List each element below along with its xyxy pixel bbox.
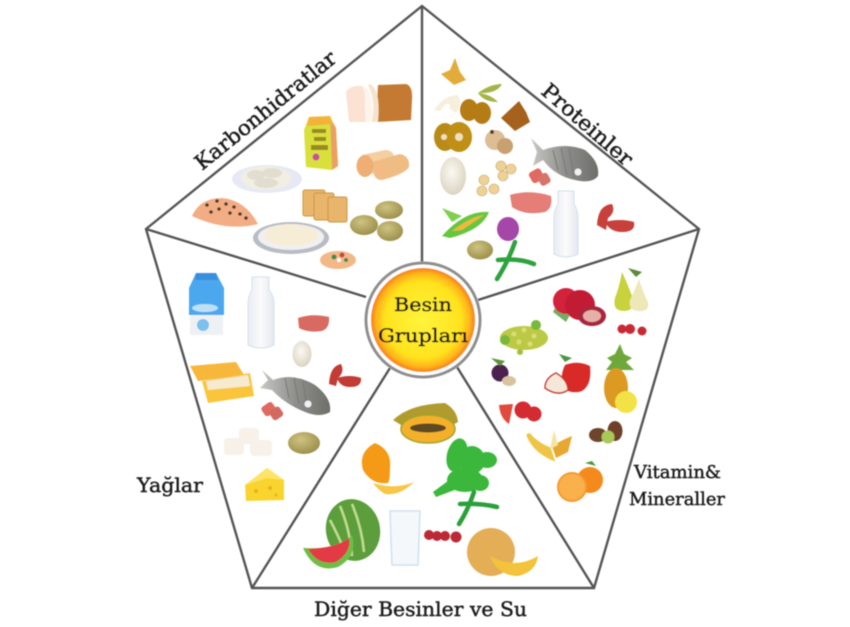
icon: red apple	[545, 354, 590, 393]
icon: shell nuts	[485, 130, 513, 154]
icon: cheese	[245, 468, 284, 501]
icon: green peas	[459, 492, 497, 524]
heading: vitamins and minerals: Vitamin&	[633, 462, 721, 483]
icon: sugar cubes	[224, 428, 272, 456]
icon: milk bottle	[248, 277, 274, 348]
icon: raw meat	[510, 192, 551, 213]
icon: milk bottle	[554, 191, 578, 257]
icon: raw meat	[298, 315, 329, 332]
icon: red onion	[497, 217, 519, 241]
heading: carbohydrates: Karbonhidratlar	[190, 45, 342, 175]
icon: orange	[558, 461, 603, 501]
icon: green grapes	[500, 320, 548, 355]
icon: red cherries	[618, 324, 646, 336]
icon: crackers	[303, 190, 347, 222]
group labels	[136, 45, 725, 621]
icon: milk carton	[189, 273, 224, 335]
panel: other foods and water	[303, 403, 538, 576]
icon: fish	[260, 370, 330, 415]
icon: kiwi	[589, 421, 622, 444]
panel: protein foods	[434, 58, 634, 279]
icon: rolled pastry	[356, 150, 409, 180]
icon: porridge plate	[253, 222, 329, 254]
icon: dried rings	[434, 122, 472, 152]
icon: olive	[288, 432, 320, 454]
icon: kidney beans	[329, 364, 361, 387]
center title	[378, 294, 468, 347]
heading: other foods and water: Diğer Besinler ve Su	[314, 597, 527, 621]
panel: carbohydrates foods	[192, 84, 412, 269]
icon: bananas	[528, 430, 572, 458]
icon: sliced bread loaf	[346, 84, 412, 122]
icon: walnuts	[460, 99, 491, 124]
icon: beans	[477, 161, 516, 196]
icon: pomegranate	[553, 288, 606, 326]
icon: pineapple	[604, 344, 637, 413]
icon: butter box	[190, 362, 254, 403]
icon: small pizza	[320, 251, 356, 269]
icon: green olives	[350, 201, 403, 241]
pentagon frame	[146, 6, 699, 588]
icon: flour bag	[304, 116, 338, 170]
center title: Besin	[394, 294, 452, 316]
center title: Grupları	[378, 325, 468, 347]
icon: glass of water	[390, 511, 420, 565]
panel: fats foods	[189, 273, 361, 501]
icon: papaya	[393, 403, 458, 443]
icon: mango	[362, 443, 414, 494]
icon: fish	[531, 138, 598, 181]
icon: salmon slices	[260, 401, 284, 421]
icon: corn	[442, 208, 489, 238]
heading: vitamins and minerals	[629, 462, 725, 510]
icon: potato	[467, 240, 493, 260]
icon: star nut	[441, 58, 466, 85]
icon: strawberries	[499, 402, 542, 424]
icon: plum	[491, 358, 516, 386]
icon: brown nut	[501, 101, 530, 131]
icon: spinach	[433, 436, 497, 497]
icon: egg	[292, 341, 312, 367]
heading: vitamins and minerals: Mineraller	[629, 489, 725, 510]
icon: leaves	[478, 84, 502, 102]
icon: seeded bread	[192, 198, 258, 227]
icon: watermelon	[303, 494, 386, 568]
icon: plate of rice	[232, 165, 302, 193]
icon: kidney beans	[597, 204, 634, 232]
heading: fats: Yağlar	[136, 473, 203, 497]
icon: cherries	[424, 530, 462, 542]
icon: egg	[440, 157, 466, 195]
icon: green peas	[497, 242, 534, 279]
heading: proteins: Proteinler	[537, 79, 639, 172]
icon: pears	[614, 268, 648, 311]
center circle	[366, 263, 480, 377]
icon: cashews	[434, 95, 460, 113]
icon: salmon slices	[528, 167, 552, 187]
icon: melon	[467, 528, 538, 576]
panel: vitamin and mineral foods	[491, 268, 648, 501]
